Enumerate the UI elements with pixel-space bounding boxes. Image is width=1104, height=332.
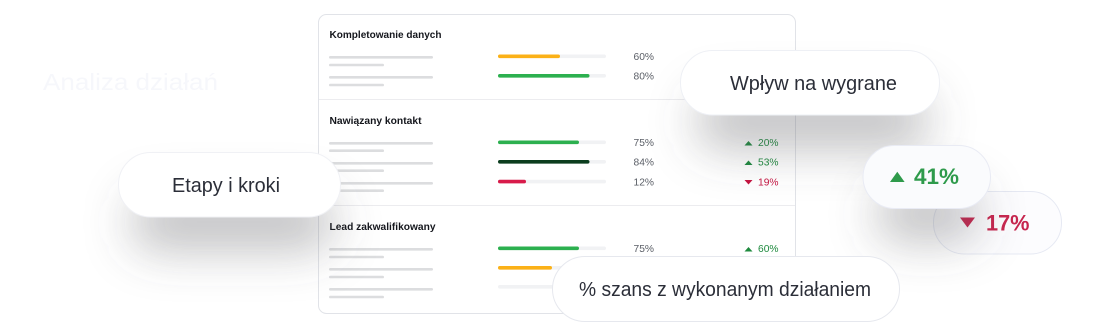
pill: Etapy i kroki: [118, 152, 340, 251]
pill: Etapy i kroki: Etapy i kroki: [172, 175, 280, 197]
pill: 17% decrease: 17%: [986, 210, 1030, 236]
background heading: Analiza działań: [43, 69, 218, 95]
panel: stages table: [318, 14, 796, 314]
icon: up triangle: [890, 172, 905, 182]
pill: % szans z wykonanym działaniem: [552, 256, 900, 322]
section: Nawiązany kontakt: Nawiązany kontakt: [330, 115, 422, 127]
section: Nawiązany kontakt: 75%: [634, 137, 654, 149]
pill: % szans z wykonanym działaniem: % szans z wykonanym działaniem: [579, 279, 871, 301]
pill: 17% decrease: [934, 192, 1062, 254]
section: Kompletowanie danych: Kompletowanie danych: [330, 29, 442, 41]
section: Lead zakwalifikowany: [329, 221, 778, 298]
section: Nawiązany kontakt: 20%: [758, 137, 778, 149]
pill: Wpływ na wygrane: Wpływ na wygrane: [730, 73, 897, 95]
pill: 41% increase: [863, 146, 990, 242]
section: Lead zakwalifikowany: 60%: [758, 243, 778, 255]
pill: 41% increase: 41%: [914, 164, 959, 189]
section: Lead zakwalifikowany: 75%: [634, 243, 654, 255]
icon: down triangle: [960, 218, 975, 228]
section: Nawiązany kontakt: [329, 115, 778, 192]
section: Kompletowanie danych: 60%: [634, 51, 654, 63]
section: Kompletowanie danych: [329, 29, 654, 86]
section: Kompletowanie danych: 80%: [634, 70, 654, 82]
section: Nawiązany kontakt: 12%: [634, 176, 654, 188]
section: Nawiązany kontakt: 53%: [758, 156, 778, 168]
section: Lead zakwalifikowany: Lead zakwalifikowany: [330, 221, 436, 233]
pill: Wpływ na wygrane: [680, 50, 940, 150]
section: Nawiązany kontakt: 84%: [634, 156, 654, 168]
section: Nawiązany kontakt: 19%: [758, 176, 778, 188]
